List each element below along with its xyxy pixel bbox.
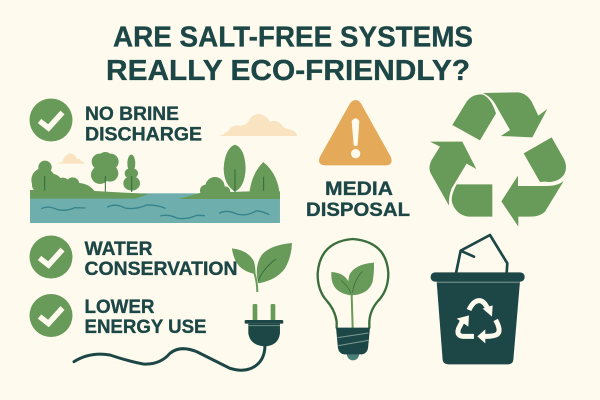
text: lower energy use: ENERGY USE (84, 316, 206, 338)
icon: check water conservation (30, 236, 72, 278)
text: water conservation (84, 238, 238, 280)
icon: light bulb with sprout (318, 239, 388, 360)
icon: sprout leaves (232, 243, 292, 292)
text: media disposal: DISPOSAL (306, 199, 410, 221)
text: no brine discharge: DISCHARGE (85, 124, 202, 146)
title (106, 22, 473, 87)
waves (41, 205, 269, 219)
text: no brine discharge: NO BRINE (85, 103, 179, 125)
text: no brine discharge (85, 103, 202, 146)
recycle symbol on bin (458, 301, 499, 336)
text: media disposal: MEDIA (325, 178, 393, 200)
title: ARE SALT-FREE SYSTEMS (113, 22, 473, 54)
icon: large cloud (219, 114, 297, 136)
text: water conservation: CONSERVATION (84, 258, 238, 280)
text: media disposal (306, 178, 410, 221)
icon: plug and cord (74, 304, 283, 370)
right bank with trees (178, 145, 280, 199)
icon: check lower energy use (30, 294, 72, 337)
left bank with trees (30, 152, 149, 199)
text: water conservation: WATER (84, 238, 152, 260)
icon: large recycling symbol (429, 92, 566, 227)
title: REALLY ECO-FRIENDLY? (106, 55, 470, 87)
icon: warning triangle (319, 100, 392, 165)
small cloud (57, 153, 85, 164)
text: lower energy use (84, 296, 206, 338)
text: lower energy use: LOWER (84, 296, 154, 318)
icon: recycling bin (431, 235, 525, 364)
icon: check no brine discharge (30, 98, 72, 142)
water (30, 193, 280, 223)
landscape (30, 145, 280, 223)
